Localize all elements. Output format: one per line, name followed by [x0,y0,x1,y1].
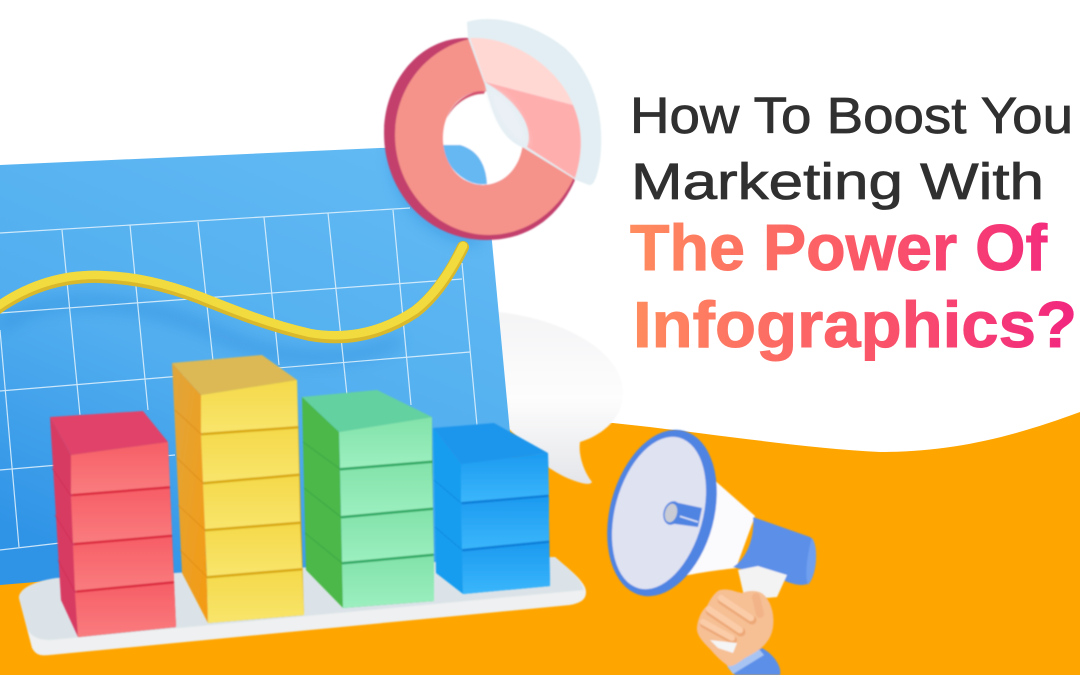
donut hole [442,91,524,185]
donut chart [384,19,601,240]
megaphone handle [738,566,787,600]
fingers [703,597,760,640]
shadow of donut and line on board [0,150,480,357]
bar: red [50,411,176,637]
donut face [395,37,583,235]
bar: yellow [172,355,304,623]
headline line 1: How To Boost You [630,87,1073,144]
headline [630,87,1077,361]
megaphone driver [661,499,702,527]
board corner seen through hole [442,145,487,184]
bar: green [302,390,434,608]
megaphone inner bell [596,426,722,600]
megaphone rim [590,417,734,609]
glass slice [467,19,601,185]
headline line 3: The Power Of [630,211,1047,284]
donut side [384,38,575,240]
donut inner wall [447,90,486,118]
sleeve [728,648,780,675]
megaphone barrel [733,517,816,585]
palm [697,589,773,666]
speech bubble [497,312,623,484]
yellow trend line [0,246,463,337]
hand holding megaphone [697,589,780,675]
bar: blue [433,423,550,594]
megaphone cone [675,478,755,578]
chart board with grid [0,145,522,585]
megaphone [590,417,816,609]
grid lines [0,208,477,550]
shelf [19,557,586,655]
headline line 2: Marketing With [631,153,1044,210]
headline line 4: Infographics? [633,288,1077,361]
handle base [710,640,737,653]
